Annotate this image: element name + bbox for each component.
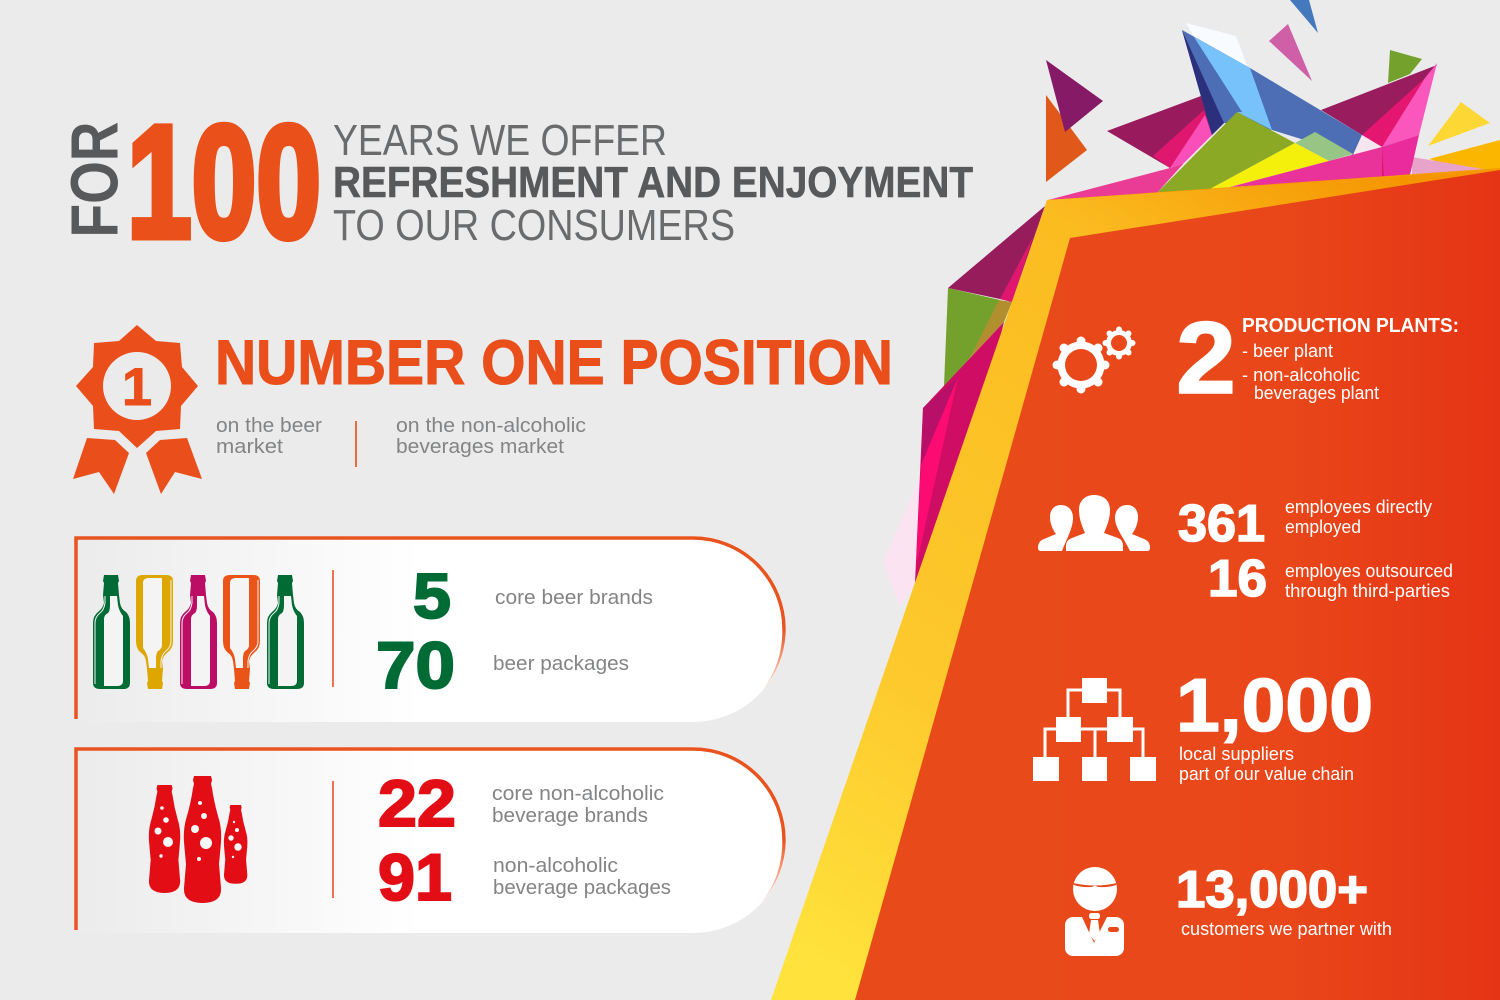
panel: non-alcoholic bbox=[75, 747, 786, 933]
stat: 70 beer packages: 70 bbox=[376, 628, 455, 702]
icon: people bbox=[1038, 495, 1150, 551]
icon: soda bottles bbox=[149, 776, 247, 903]
label: outsourced bbox=[1285, 560, 1453, 601]
label: local suppliers: local suppliers bbox=[1179, 743, 1294, 764]
heading: number one position: NUMBER ONE POSITION bbox=[215, 328, 893, 398]
list: plants: - non-alcoholic bbox=[1242, 364, 1360, 385]
list: plants: - beer plant bbox=[1242, 340, 1333, 361]
text: non-alcoholic market: on the non-alcoholic bbox=[396, 414, 586, 437]
label: outsourced: through third-parties bbox=[1285, 580, 1450, 601]
icon: number one rosette bbox=[73, 325, 202, 494]
graphic: top colour shards bbox=[1046, 0, 1500, 210]
graphic: yellow band bbox=[771, 170, 1500, 1000]
title line 1: YEARS WE OFFER bbox=[333, 116, 667, 165]
stat: customers bbox=[1065, 861, 1392, 956]
label: directly employed: employed bbox=[1285, 516, 1361, 537]
icon: network bbox=[1033, 678, 1156, 781]
stat: employees bbox=[1038, 495, 1453, 608]
label: local suppliers: part of our value chain bbox=[1179, 763, 1354, 784]
number: 1,000: 1,000 bbox=[1176, 663, 1373, 747]
stat: 5 core beer brands bbox=[413, 560, 653, 632]
stat: 70 beer packages: beer packages bbox=[493, 652, 629, 675]
panel: red background bbox=[855, 170, 1500, 1000]
title line 3: TO OUR CONSUMERS bbox=[333, 201, 735, 250]
text: beer market bbox=[216, 414, 322, 458]
label: directly employed: employees directly bbox=[1285, 496, 1433, 517]
icon: gears bbox=[1052, 326, 1136, 394]
label: customers: customers we partner with bbox=[1181, 918, 1392, 939]
number: 13,000+: 13,000+ bbox=[1176, 861, 1368, 919]
title word: FOR: FOR bbox=[58, 122, 132, 238]
stat: 5 core beer brands: 5 bbox=[413, 560, 451, 632]
stat: 91 packages: beverage packages bbox=[493, 876, 671, 899]
number: 2: 2 bbox=[1176, 301, 1236, 415]
text: non-alcoholic market: beverages market bbox=[396, 435, 564, 458]
icon: person with glasses bbox=[1065, 867, 1124, 956]
title bbox=[58, 92, 973, 271]
label: directly employed bbox=[1285, 496, 1433, 537]
stat: suppliers bbox=[1033, 663, 1373, 784]
stat: 22 core brands bbox=[378, 766, 664, 840]
title line 2: REFRESHMENT AND ENJOYMENT bbox=[333, 158, 973, 207]
stat: 22 core brands: 22 bbox=[378, 766, 456, 840]
stat: 70 beer packages bbox=[376, 628, 629, 702]
stat: 22 core brands: beverage brands bbox=[492, 804, 648, 827]
panel: beer bbox=[75, 536, 786, 722]
stat: production plants bbox=[1052, 301, 1459, 415]
label: outsourced: employes outsourced bbox=[1285, 560, 1453, 581]
list: plants: beverages plant bbox=[1254, 382, 1379, 403]
text: non-alcoholic market bbox=[396, 414, 586, 458]
stat: 5 core beer brands: core beer brands bbox=[495, 586, 653, 609]
stat: 91 packages: non-alcoholic bbox=[493, 854, 618, 877]
text: beer market: on the beer bbox=[216, 414, 322, 437]
title number: 100: 100 bbox=[127, 92, 321, 271]
number: 361: 361 bbox=[1178, 495, 1265, 553]
icon: number one rosette: 1 bbox=[122, 358, 152, 417]
text: beer market: market bbox=[216, 435, 283, 458]
stat: 91 packages bbox=[378, 840, 671, 914]
graphic: left colour shards bbox=[883, 206, 1045, 607]
label: local suppliers bbox=[1179, 743, 1354, 784]
list: plants bbox=[1242, 340, 1379, 403]
stat: 91 packages: 91 bbox=[378, 840, 452, 914]
icon: beer bottles bbox=[93, 575, 304, 689]
number: 16: 16 bbox=[1208, 550, 1267, 608]
stat: 22 core brands: core non-alcoholic bbox=[492, 782, 664, 805]
label: production plants: PRODUCTION PLANTS: bbox=[1242, 314, 1459, 337]
